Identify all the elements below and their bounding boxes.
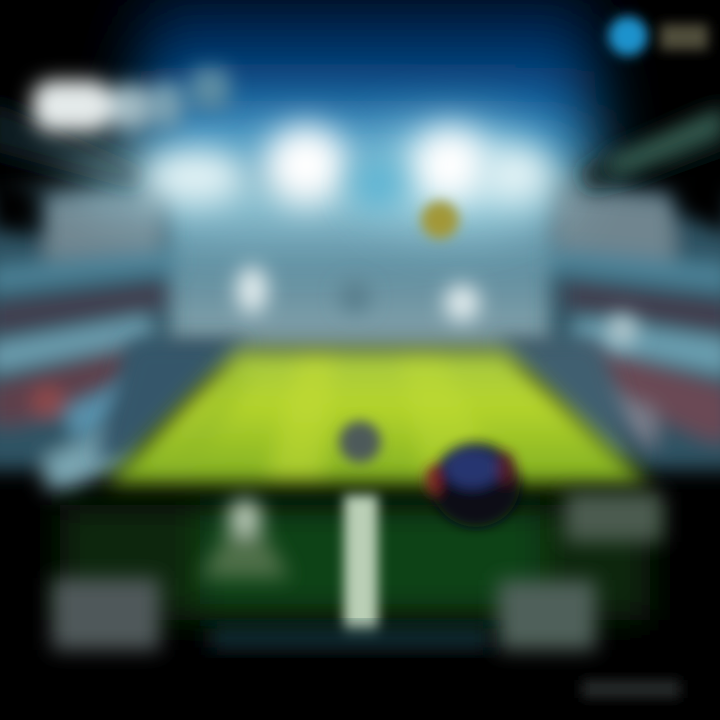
roof beams [0,100,720,235]
right stand [550,180,720,470]
dark lower field [60,505,650,620]
bottom strip [210,628,490,648]
info box: right lower [498,580,596,650]
stand markers [236,266,638,346]
ball on pitch [339,421,381,463]
title [32,68,230,132]
large football [426,443,520,527]
stand fill beside pitch [95,340,640,460]
left stand [0,180,175,490]
floodlights [60,120,570,230]
footer label [582,680,680,698]
falling ball [421,201,459,239]
logo circle [608,16,648,56]
info box: right upper [565,492,663,542]
centre column [344,495,378,633]
centre icon: marker [200,499,290,578]
central stand [120,175,610,355]
logo badge [608,16,708,56]
info box: left lower [52,578,160,650]
sky glow [130,0,600,190]
logo text [660,24,708,50]
pitch [105,350,650,484]
